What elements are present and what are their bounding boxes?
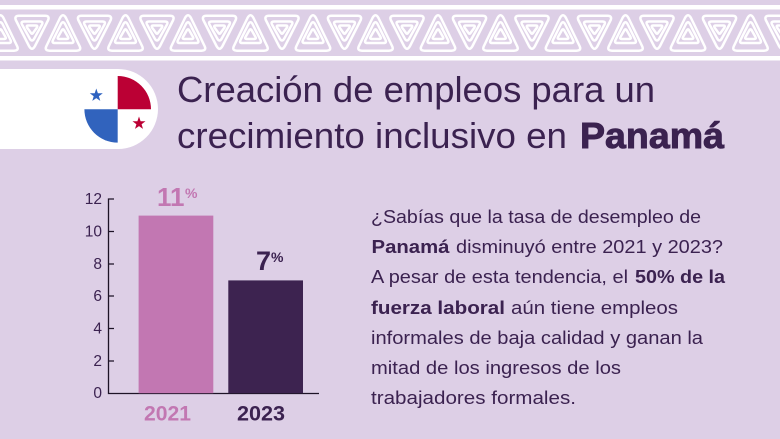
icon: Panama flag [84, 76, 151, 143]
value label: 11%: 11 [157, 182, 184, 212]
y axis labels: 0 [93, 385, 102, 402]
bar: 2021 [139, 216, 213, 393]
decorative top border pattern [0, 5, 780, 60]
y axis labels: 2 [93, 353, 102, 370]
body paragraph: informales de baja calidad y ganan la [371, 328, 704, 348]
value label: 11%: % [185, 185, 198, 201]
body paragraph: fuerza laboral [371, 298, 505, 318]
title: crecimiento inclusivo en [177, 115, 567, 156]
bar: 2023 [228, 280, 303, 393]
value label: 7%: % [271, 249, 284, 265]
body paragraph: trabajadores formales. [371, 388, 576, 408]
bar chart: unemployment rate [85, 182, 319, 426]
y axis labels: 12 [85, 191, 102, 208]
y axis labels: 6 [93, 288, 102, 305]
x label: 2023: 2023 [237, 402, 285, 426]
y axis with ticks [108, 199, 319, 394]
y axis labels [85, 191, 102, 402]
x label: 2021: 2021 [144, 402, 191, 426]
title [177, 69, 725, 156]
flag pill panel [0, 69, 158, 149]
body paragraph: mitad de los ingresos de los [371, 358, 621, 378]
y axis labels: 8 [93, 256, 102, 273]
body paragraph: disminuyó entre 2021 y 2023? [456, 237, 723, 257]
y axis labels: 4 [93, 320, 102, 338]
body paragraph [371, 207, 726, 408]
title: Creación de empleos para un [177, 69, 655, 110]
body paragraph: aún tiene empleos [511, 298, 678, 318]
y axis labels: 10 [85, 224, 102, 240]
body paragraph: A pesar de esta tendencia, el [371, 267, 628, 287]
body paragraph: ¿Sabías que la tasa de desempleo de [371, 207, 701, 227]
title: Panamá [580, 115, 725, 156]
body paragraph: Panamá [372, 237, 451, 257]
value label: 7%: 7 [256, 246, 271, 276]
body paragraph: 50% de la [635, 267, 726, 287]
